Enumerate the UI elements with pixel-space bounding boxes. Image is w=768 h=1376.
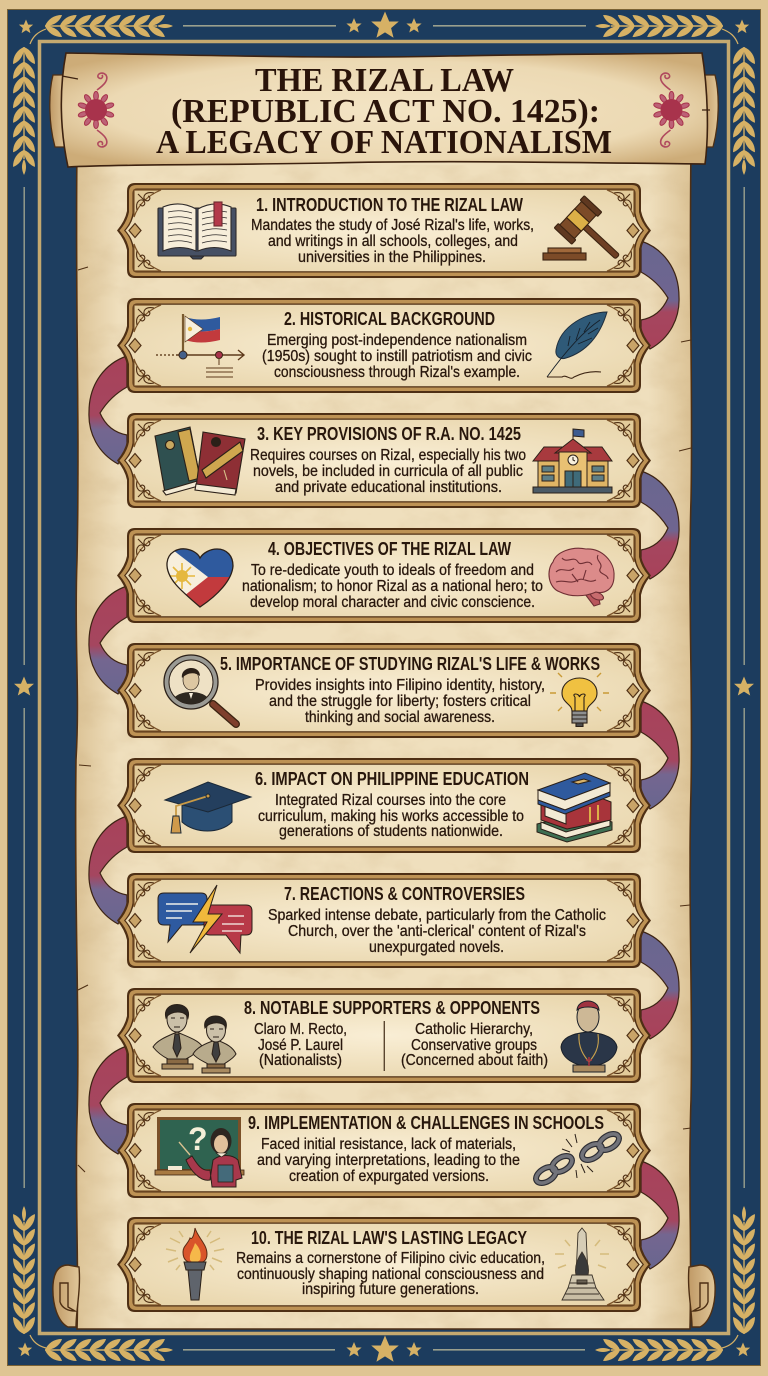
icon: flag on timeline — [156, 314, 244, 377]
supporters list: (Nationalists) — [259, 1052, 342, 1069]
icon: magnifier over portrait — [164, 655, 236, 724]
top decorative band — [19, 12, 749, 44]
body text: and writings in all schools, colleges, and — [268, 233, 518, 250]
heading: 6. IMPACT ON PHILIPPINE EDUCATION — [255, 769, 529, 789]
body text: Provides insights into Filipino identity, history, — [255, 677, 545, 694]
body text: and private educational institutions. — [275, 479, 502, 496]
panel frame — [117, 1103, 651, 1198]
panel 7: reactions — [117, 873, 651, 968]
body text — [250, 447, 526, 496]
parchment scroll body — [53, 150, 715, 1329]
body text: consciousness through Rizal's example. — [274, 364, 520, 381]
body text: Remains a cornerstone of Filipino civic education, — [236, 1250, 545, 1267]
body text: and varying interpretations, leading to the — [257, 1152, 520, 1169]
body text — [262, 332, 532, 381]
panel 9: implementation — [117, 1103, 651, 1198]
body text: develop moral character and civic conscience. — [250, 594, 535, 611]
body text: To re-dedicate youth to ideals of freedom and — [251, 562, 534, 579]
heading: 8. NOTABLE SUPPORTERS & OPPONENTS — [244, 998, 540, 1018]
title: A LEGACY OF NATIONALISM — [156, 124, 612, 161]
bottom right roll — [689, 1265, 715, 1327]
icon: chat bubbles with lightning — [158, 885, 252, 953]
body text: continuously shaping national consciousness and — [237, 1266, 544, 1283]
body text: thinking and social awareness. — [305, 709, 495, 726]
panel 1: introduction — [117, 183, 651, 278]
body text — [257, 1136, 520, 1185]
title: (REPUBLIC ACT NO. 1425): — [171, 93, 600, 130]
opponents list: (Concerned about faith) — [401, 1052, 548, 1069]
right side decoration — [733, 47, 755, 1334]
panel 3: key provisions — [117, 413, 651, 508]
body text — [251, 217, 534, 266]
icon: torch — [166, 1228, 224, 1300]
body text: Sparked intense debate, particularly from the Catholic — [268, 907, 606, 924]
panel frame — [117, 183, 651, 278]
body text: universities in the Philippines. — [298, 249, 486, 266]
divider — [384, 1021, 385, 1071]
icon: bust of bishop — [561, 1001, 617, 1072]
connecting ribbons — [89, 241, 679, 1269]
bottom decorative band — [18, 1335, 750, 1362]
icon: brain — [549, 548, 614, 606]
body text: creation of expurgated versions. — [289, 1168, 489, 1185]
body text: curriculum, making his works accessible to — [258, 808, 524, 825]
body text: novels, be included in curricula of all public — [253, 463, 523, 480]
icon: Philippine flag heart — [166, 548, 234, 608]
panel frame — [117, 873, 651, 968]
body text: unexpurgated novels. — [369, 939, 504, 956]
icon: stack of books — [537, 773, 612, 842]
title — [156, 62, 612, 161]
header scroll with title — [50, 53, 718, 167]
panel 10: lasting legacy — [117, 1217, 651, 1312]
panel 6: impact — [117, 758, 651, 853]
opponents list — [401, 1021, 548, 1069]
body text — [268, 907, 606, 956]
body text: generations of students nationwide. — [279, 823, 503, 840]
icon: quill feather — [547, 312, 607, 378]
panel frame — [117, 413, 651, 508]
body text: and the struggle for liberty; fosters critical — [269, 693, 531, 710]
supporters list — [254, 1021, 347, 1069]
icon: busts of supporters — [153, 1004, 236, 1073]
panel 2: historical background — [117, 298, 651, 393]
panel 4: objectives — [117, 528, 651, 623]
body text — [258, 792, 524, 840]
body text — [242, 562, 543, 611]
body text — [236, 1250, 545, 1298]
body text: Church, over the 'anti-clerical' content of Rizal's — [288, 923, 586, 940]
icon: broken chain — [533, 1131, 622, 1186]
icon: graduation cap — [165, 782, 251, 833]
icon: light bulb — [550, 673, 609, 726]
panel frame — [117, 758, 651, 853]
icon: Rizal monument — [555, 1228, 609, 1300]
body text: Emerging post-independence nationalism — [267, 332, 527, 349]
body text: Requires courses on Rizal, especially his two — [250, 447, 526, 464]
bottom left roll — [53, 1265, 79, 1327]
heading: 7. REACTIONS & CONTROVERSIES — [284, 884, 525, 904]
icon: school building — [533, 429, 612, 493]
opponents list: Catholic Hierarchy, — [415, 1021, 533, 1038]
body text: nationalism; to honor Rizal as a national hero; to — [242, 578, 543, 595]
body text: inspiring future generations. — [302, 1281, 479, 1298]
heading: 9. IMPLEMENTATION & CHALLENGES IN SCHOOLS — [248, 1113, 604, 1133]
icon: left sun ornament — [78, 73, 114, 147]
body text: (1950s) sought to instill patriotism and civic — [262, 348, 532, 365]
left side decoration — [13, 47, 35, 1334]
heading: 10. THE RIZAL LAW'S LASTING LEGACY — [251, 1228, 527, 1248]
panel frame — [117, 1217, 651, 1312]
icon: chalkboard and teacher: ? — [188, 1121, 208, 1157]
heading: 5. IMPORTANCE OF STUDYING RIZAL'S LIFE & WORKS — [220, 654, 600, 674]
heading: 1. INTRODUCTION TO THE RIZAL LAW — [256, 195, 523, 215]
opponents list: Conservative groups — [411, 1037, 537, 1054]
body text: Integrated Rizal courses into the core — [275, 792, 506, 809]
panel 8: supporters and opponents — [117, 988, 651, 1083]
body text: Faced initial resistance, lack of materials, — [261, 1136, 516, 1153]
supporters list: José P. Laurel — [258, 1037, 343, 1054]
heading: 3. KEY PROVISIONS OF R.A. NO. 1425 — [257, 424, 521, 444]
body text — [255, 677, 545, 726]
icon: two novels — [155, 427, 245, 495]
heading: 2. HISTORICAL BACKGROUND — [284, 309, 495, 329]
panel frame — [117, 298, 651, 393]
panel frame — [117, 988, 651, 1083]
panel frame — [117, 528, 651, 623]
heading: 4. OBJECTIVES OF THE RIZAL LAW — [268, 539, 511, 559]
panel frame — [117, 643, 651, 738]
icon: chalkboard and teacher — [155, 1118, 244, 1187]
supporters list: Claro M. Recto, — [254, 1021, 347, 1038]
panel 5: importance — [117, 643, 651, 738]
icon: open book — [158, 202, 236, 259]
body text: Mandates the study of José Rizal's life, works, — [251, 217, 534, 234]
title: THE RIZAL LAW — [255, 62, 514, 99]
icon: gavel — [543, 196, 632, 273]
icon: right sun ornament — [653, 73, 690, 147]
